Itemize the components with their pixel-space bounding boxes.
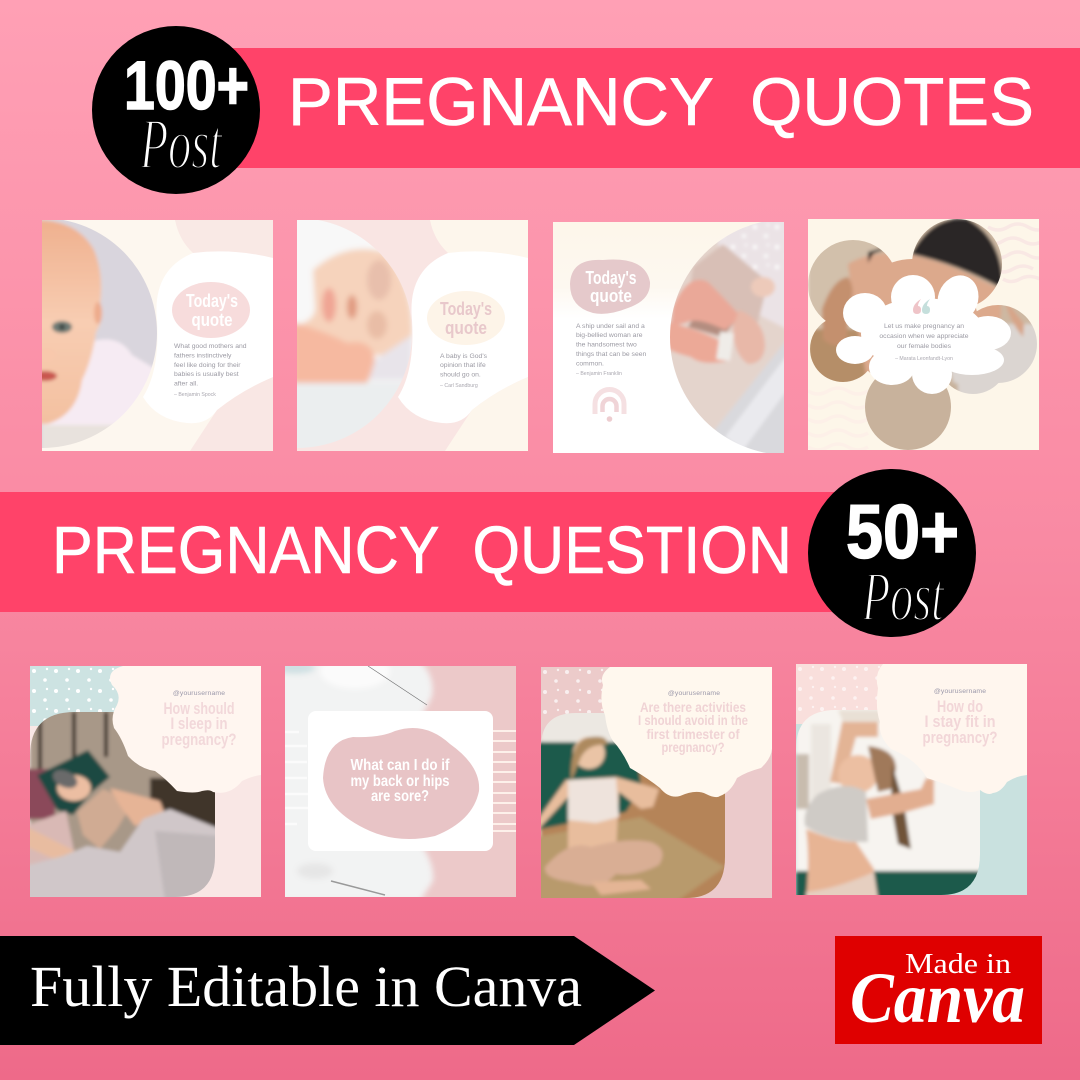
icon: quote mark: [913, 299, 930, 314]
card: quote 1: [33, 215, 273, 455]
quote text: opinion that life: [440, 362, 486, 369]
question text: pregnancy?: [662, 740, 724, 755]
badge: made in canva: Canva: [850, 958, 1025, 1038]
badge: 50+ post: Post: [861, 559, 945, 636]
question text: [922, 688, 998, 747]
badge: 100+ post: 100+: [124, 47, 249, 124]
banner: pregnancy quotes: PREGNANCY QUOTES: [288, 64, 1034, 140]
question text: I stay fit in: [924, 713, 996, 731]
question text: How do: [937, 698, 983, 716]
icon: rainbow: [595, 390, 624, 422]
quote text: – Marata Leonfandt-Lyon: [895, 356, 953, 362]
card: quote 4: [808, 218, 1048, 454]
card: question 2: [285, 666, 516, 897]
quote text: the handsomest two: [576, 342, 637, 348]
blob: question panel: [110, 666, 261, 793]
quote text: should go on.: [440, 372, 481, 378]
quote text: [174, 343, 247, 398]
question text: first trimester of: [646, 727, 740, 742]
blob: today's quote: [427, 291, 505, 345]
banner: pregnancy question: [0, 492, 835, 612]
photo: soft background: [285, 666, 436, 897]
photo: pregnant belly: [808, 218, 1043, 454]
blob: today's quote: Today's: [440, 299, 492, 319]
photo: sleeping baby: [297, 220, 412, 448]
quote text: [879, 323, 969, 362]
blob: today's quote: quote: [445, 318, 487, 338]
photo: baby: [42, 220, 157, 448]
card: question 3: [536, 667, 772, 902]
question text: @yourusername: [668, 690, 720, 697]
blob: question panel: [601, 667, 772, 797]
quote text: feel like doing for their: [174, 362, 241, 369]
badge: 100+ post: Post: [139, 104, 223, 184]
quote text: things that can be seen: [576, 351, 647, 358]
question text: I should avoid in the: [638, 713, 748, 728]
quote text: fathers instinctively: [174, 352, 232, 360]
blob: question: are sore?: [371, 788, 429, 805]
quote text: A ship under sail and a: [576, 323, 645, 330]
question text: How should: [164, 700, 234, 718]
quote text: [576, 323, 647, 377]
blob: question: my back or hips: [350, 773, 450, 790]
question text: [162, 690, 236, 749]
photo: seated yoga: [541, 713, 725, 898]
question text: Are there activities: [640, 700, 746, 715]
blob: today's quote: [570, 259, 650, 314]
blob: today's quote: Today's: [186, 291, 238, 311]
question text: @yourusername: [934, 688, 986, 695]
question text: pregnancy?: [162, 731, 236, 749]
badge: made in canva: [835, 936, 1042, 1044]
blob: today's quote: quote: [590, 286, 632, 306]
quote text: – Carl Sandburg: [440, 383, 478, 389]
card: quote 3: [553, 217, 793, 462]
blob: white flower: [836, 270, 1011, 394]
white panel: [308, 711, 493, 851]
arrow banner: fully editable in canva: Fully Editable in Canva: [30, 954, 582, 1019]
quote text: occasion when we appreciate: [879, 333, 969, 340]
photo: newborn feet: [670, 222, 784, 453]
badge: made in canva: Made in: [905, 949, 1011, 980]
quote text: [440, 353, 488, 389]
badge: 50+ post: 50+: [846, 490, 959, 575]
arrow banner: fully editable in canva: [0, 936, 655, 1045]
banner: pregnancy quotes: [230, 48, 1080, 168]
badge: 50+ post: [808, 469, 976, 637]
blob: question: What can I do if: [350, 757, 450, 774]
photo: sleeping woman: [25, 706, 220, 901]
quote text: big-bellied woman are: [576, 332, 643, 339]
quote text: after all.: [174, 380, 198, 388]
quote text: common.: [576, 360, 604, 368]
blob: today's quote: [172, 282, 250, 338]
question text: @yourusername: [173, 690, 225, 697]
card: question 4: [796, 664, 1027, 899]
card: quote 2: [292, 215, 528, 457]
question text: [638, 690, 748, 755]
card: question 1: [25, 666, 261, 901]
quote text: What good mothers and: [174, 343, 247, 350]
quote text: A baby is God's: [440, 353, 488, 360]
quote text: our female bodies: [897, 343, 952, 350]
quote text: – Benjamin Franklin: [576, 371, 622, 377]
photo: stretching woman: [796, 704, 986, 899]
quote text: – Benjamin Spock: [174, 392, 216, 398]
blob: today's quote: Today's: [586, 268, 636, 288]
question text: pregnancy?: [922, 729, 998, 747]
blob: question panel: [877, 664, 1027, 794]
quote text: babies is usually best: [174, 371, 239, 378]
question text: I sleep in: [170, 715, 228, 733]
blob: question: [323, 728, 479, 839]
blob: today's quote: quote: [192, 310, 232, 330]
badge: 100+ post: [92, 26, 260, 194]
quote text: Let us make pregnancy an: [884, 323, 964, 330]
banner: pregnancy question: PREGNANCY QUESTION: [52, 513, 792, 588]
